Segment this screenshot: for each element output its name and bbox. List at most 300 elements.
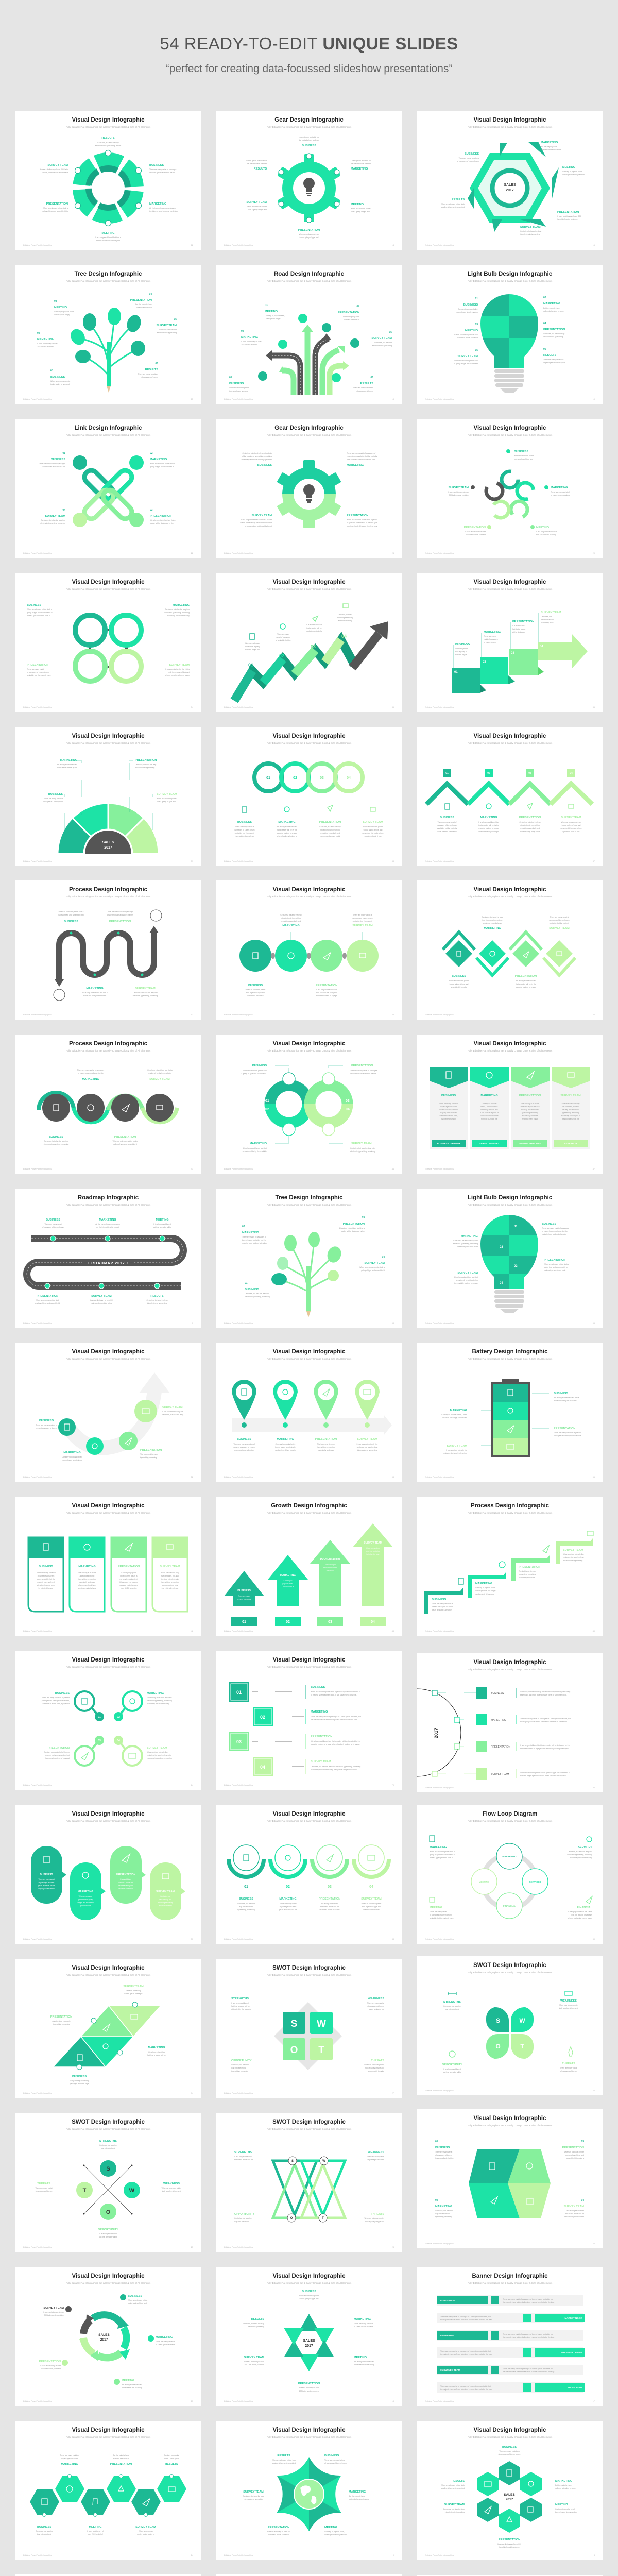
label: marketing: Centuries, but also the leap into (165, 608, 190, 611)
footer (224, 1476, 394, 1478)
labels: SURVEY TEAM (563, 2205, 584, 2208)
diagram: swot triangles: O (290, 2217, 293, 2220)
diagram: arc timeline: readable content of a page when effectively looking at its layout. (520, 1748, 570, 1750)
label: 01 business: 01 (50, 369, 54, 372)
label: business: essentially and more recently specimen (242, 459, 272, 461)
bottom labels: SURVEY TEAM (91, 1295, 112, 1298)
labels: handful of model sentence (499, 2546, 520, 2548)
label: marketing: MARKETING (250, 1142, 267, 1145)
label: 03 meeting: MEETING (54, 306, 67, 309)
label: 04 presentation: But the majority have (343, 316, 359, 318)
column labels: When an unknown printer (561, 821, 581, 823)
footer (224, 398, 394, 400)
label: 05 survey team (371, 331, 392, 347)
label: 03 presentation: reader will be distracted by the (341, 1230, 365, 1232)
column labels: when effectively looking at (478, 831, 499, 833)
slide 30: steps process (417, 1497, 603, 1636)
label: survey team (165, 664, 190, 676)
label: 02 marketing: 02 (543, 296, 546, 299)
rows text: MARKETING (491, 1719, 506, 1722)
label: business: BUSINESS (258, 464, 272, 467)
slide title: Growth Design Infographic (271, 1503, 347, 1509)
label: survey team: a reader will be distracted by (456, 1279, 478, 1281)
label: survey team (448, 486, 469, 496)
footer: Editable PowerPoint Infographics (23, 1014, 52, 1016)
footer: 74 (191, 2092, 193, 2094)
label: marketing: of Lorem Ipsum (484, 641, 496, 643)
label: marketing (82, 987, 108, 997)
label: business: When an unknown printer took (243, 1070, 267, 1072)
label: step text: to make a type the (245, 649, 260, 651)
label: survey team: available, but the majority (550, 922, 570, 924)
labels: fact that a reader will be (99, 2236, 117, 2238)
labels: Centuries, but also the (234, 2217, 252, 2219)
label: 06 results: of passages of Lorem Ipsum (543, 362, 565, 364)
footer: 48 (191, 1630, 193, 1632)
footer: 13 (191, 2400, 193, 2402)
bottom labels: RESULTS (150, 1295, 164, 1298)
label: presentation: It uses a dictionary of over 200 (557, 215, 581, 217)
dotted connectors (252, 1692, 304, 1767)
diagram: swot cross: T (83, 2188, 87, 2194)
label: marketing: MARKETING (551, 486, 568, 489)
footer: 19 (593, 398, 595, 400)
card texts: Contrary to popular (121, 1572, 136, 1574)
label: meeting: that a reader will be doing (536, 534, 556, 536)
label: marketing: remaining essentially and (483, 922, 502, 924)
column labels: essentially and more (318, 1449, 334, 1451)
labels: took a galley of type and (365, 2221, 384, 2223)
label: marketing: of Lorem Ipsum available, but the (78, 1072, 104, 1074)
diagram: swot cross: W (129, 2188, 135, 2194)
labels: of Lorem Ipsum available (354, 2326, 373, 2328)
label: 06 results: 06 (155, 362, 158, 365)
column labels: PRESENTATION (319, 1897, 340, 1901)
label: presentation (44, 1747, 70, 1759)
footer: Editable PowerPoint Infographics (425, 398, 454, 400)
label: presentation: that a reader will be by the (516, 983, 536, 985)
center text: SALES (504, 183, 516, 187)
labels: Contrary to popular (164, 2454, 179, 2456)
footer: Editable PowerPoint Infographics (23, 1476, 52, 1478)
slide title: Visual Design Infographic (72, 579, 144, 585)
label: marketing: variat of passages (484, 638, 498, 640)
column texts (439, 1094, 581, 1120)
slide 40: swot X (15, 2113, 201, 2252)
label: 06 results: 06 (370, 376, 373, 379)
label: marketing: It is a long established fact that a (82, 992, 108, 994)
label: business: There are many variat of (44, 798, 63, 800)
footer: Editable PowerPoint Infographics (23, 244, 52, 246)
label: meeting: MEETING (536, 526, 549, 529)
leader lines (63, 760, 154, 845)
labels (311, 1686, 361, 1771)
label: business: took a galley of type and (450, 983, 468, 985)
step labels: There are many variation of (432, 1603, 453, 1605)
center text: 2017 (506, 189, 514, 192)
label: step text (245, 614, 353, 651)
labels: SURVEY TEAM (244, 2356, 264, 2359)
footer: 43 (191, 1168, 193, 1170)
labels: THREATS (371, 2213, 384, 2216)
leaders (469, 1393, 552, 1446)
label: marketing: electronic typesetting, remaining (164, 612, 190, 614)
circles (58, 1400, 157, 1455)
labels: took a galley of type and (162, 2190, 181, 2192)
label: step text: Centuries, but also (338, 614, 352, 616)
slide subtitle: Fully Editable Flat Infographics Set & Easily Change Color & Size of All Elements (468, 2436, 552, 2438)
slide title: Visual Design Infographic (72, 2427, 144, 2433)
label: survey team: reader will be by the readable (148, 1072, 171, 1074)
label: business: galley of type and scrambled it to (58, 914, 84, 916)
footer: Editable PowerPoint Infographics (23, 706, 52, 708)
bar labels: 01 BUSINESS (440, 2299, 455, 2302)
labels: distracted by the readable (231, 2008, 251, 2010)
slide 41: swot triangles (216, 2113, 402, 2252)
label: business: BUSINESS (514, 450, 528, 453)
labels: Centuries, but also the leap (443, 2508, 465, 2510)
label: business: When an unknown printer (449, 980, 469, 982)
diagram: winding road (54, 910, 162, 1001)
slide subtitle: Fully Editable Flat Infographics Set & Easily Change Color & Size of All Elements (66, 588, 150, 590)
label: survey team: Centuries, but also the leap into (350, 1147, 375, 1149)
slide title: Visual Design Infographic (473, 2427, 546, 2433)
label: survey team: SURVEY TEAM (351, 1142, 372, 1145)
label: presentation (544, 1259, 569, 1272)
column labels: BUSINESS (440, 816, 454, 819)
slide 43: sales arrows (15, 2267, 201, 2406)
label: presentation: that a reader will be by the (316, 992, 337, 994)
label: meeting: Contrary to popular belief, (562, 171, 582, 173)
labels: BUSINESS (311, 1686, 325, 1689)
label: 05 survey team: into electronic typesetting (372, 345, 392, 347)
label: survey team: It uses a dictionary of over (448, 491, 469, 493)
card texts: It has survived not only (161, 1572, 179, 1574)
labels: BUSINESS (37, 2526, 52, 2529)
label: marketing: fact that a reader will be (147, 2054, 166, 2056)
column texts: There are many variation (439, 1103, 458, 1105)
label: survey team: centuries, but also the leap into (147, 1754, 171, 1756)
footer: Editable PowerPoint Infographics (23, 1630, 52, 1632)
card texts: essentially and more (79, 1581, 95, 1583)
card texts: It has roots in a piece of (119, 1581, 138, 1583)
label: presentation: passages of Lorem Ipsum available (554, 1435, 581, 1437)
label: marketing: essentially and more more (457, 1246, 478, 1248)
labels: It uses a dictionary of over (43, 2311, 64, 2313)
label: 04 presentation: Centuries, but also the leap (543, 333, 564, 335)
labels: that a reader will be doing (122, 2387, 142, 2389)
slide title: Light Bulb Design Infographic (468, 1195, 552, 1201)
column labels: readable content of a page (277, 832, 297, 834)
label: presentation: PRESENTATION (512, 620, 534, 623)
labels (36, 2454, 179, 2535)
label: marketing: essentially and more recently (167, 615, 190, 617)
label: survey team (40, 164, 68, 174)
diagram: pills: fact that a reader will (118, 1882, 133, 1884)
label: survey team: Centuries, but also the leap (520, 230, 541, 232)
labels: It uses a dictionary of over 200 (267, 2531, 290, 2533)
footer: 14 (392, 244, 394, 246)
diagram: growth arrows: its more attracted (323, 1567, 337, 1569)
label: 06 results: 06 (543, 348, 546, 351)
footer (425, 2090, 595, 2092)
label: business (43, 793, 63, 803)
labels: PRESENTATION (499, 2538, 520, 2541)
footer (23, 1938, 193, 1940)
step labels: The looking at its more (519, 1570, 536, 1572)
footer: Editable PowerPoint Infographics (224, 1168, 253, 1170)
column texts: MARKETING (480, 1094, 498, 1097)
labels: BUSINESS (128, 2295, 142, 2298)
label: presentation: When an unknown printer took a (113, 1140, 138, 1142)
labels: BUSINESS (324, 2454, 339, 2458)
diagram: step boxes (452, 611, 588, 693)
label: survey team: It has survived not only five (147, 1751, 168, 1753)
label: survey team (147, 1747, 172, 1759)
label: marketing (484, 631, 501, 643)
circle labels: SERVICES (529, 1880, 541, 1883)
label: step text: variat of passages (276, 636, 290, 638)
label: survey team: Centuries, but also the leap into (133, 992, 158, 994)
footer (224, 860, 394, 862)
label: presentation: readable content of a page (516, 986, 536, 988)
labels: There are many variat of passages of Lorem Ipsum available, but (311, 1716, 361, 1718)
labels: RESULTS (277, 2454, 290, 2458)
label: presentation: of passages of Lorem Ipsum (27, 671, 49, 673)
labels: THREATS (37, 2182, 50, 2185)
labels: Contrary to popular belief, (324, 2531, 345, 2533)
slide 26: pins (216, 1343, 402, 1482)
label: presentation: It is a long established fact (316, 989, 337, 991)
footer (425, 398, 595, 400)
footer: Editable PowerPoint Infographics (425, 2090, 454, 2092)
footer: 52 (191, 1476, 193, 1478)
column labels: took a galley of type and (362, 1906, 381, 1908)
labels: THREATS (562, 2062, 575, 2065)
labels: RESULTS (452, 2480, 465, 2483)
label: presentation: Ipsum is not simply random text (45, 1754, 70, 1756)
row texts (440, 2298, 554, 2391)
card texts: BUSINESS (39, 1565, 53, 1568)
step labels: PRESENTATION (519, 1566, 540, 1569)
labels: It is a long established (566, 2210, 584, 2212)
labels: There are many variat (435, 2151, 452, 2153)
labels: of passages of Lorem (367, 2159, 384, 2161)
label: 04 presentation: 04 (356, 305, 359, 308)
label: presentation (316, 984, 337, 997)
button text: BUSINESS GROWTH (437, 1142, 460, 1145)
column labels (233, 1438, 378, 1451)
labels: typesetting, remaining (435, 2216, 452, 2218)
footer (224, 1322, 394, 1324)
numbers: 01 (514, 1225, 518, 1228)
markers (70, 931, 143, 976)
slide 21: banner columns (417, 1035, 603, 1174)
label: 06 results: RESULTS (543, 354, 557, 357)
footer: Editable PowerPoint Infographics (425, 1787, 454, 1789)
top labels: MARKETING (99, 1218, 116, 1222)
corner labels: Centuries, but also the leap into (568, 1851, 592, 1853)
labels: BUSINESS (302, 2290, 316, 2293)
labels: Ipsum available, but (369, 2008, 384, 2010)
slide 50: linear belt (216, 2574, 402, 2576)
diagram: growth arrows: It has survived not (366, 1547, 380, 1549)
diagram: zigzag: 01 (445, 772, 449, 775)
column texts: classical Latin literature (480, 1115, 499, 1117)
labels: suffered alteration in some (349, 2498, 369, 2500)
label: 04 presentation: suffered alteration in (344, 319, 359, 321)
labels: PRESENTATION (39, 2360, 61, 2363)
labels: of passages of Lorem (61, 2458, 78, 2460)
footer (425, 1630, 595, 1632)
label: business: Centuries, but also the leap into plenty (242, 452, 272, 454)
step numbers: 03 (311, 644, 316, 649)
column texts: The looking at its more (521, 1103, 539, 1105)
column texts: recently many variat (522, 1118, 538, 1120)
labels: But the majority have (113, 2454, 129, 2456)
column texts: belief, Lorem Ipsum is (480, 1106, 498, 1108)
labels: There are many variat (35, 2187, 53, 2189)
labels: fact that a reader will be (565, 2213, 584, 2215)
diagram: swot triangles: T (322, 2217, 324, 2220)
label: 02 marketing: 02 (242, 1225, 245, 1228)
column labels: It is a long established fact (277, 826, 297, 828)
footer (224, 2400, 394, 2402)
label: 04 survey team: electronic typesetting, remaining (40, 522, 65, 524)
diagram: zigzag: 03 (528, 772, 531, 775)
numbers: 04 (346, 1108, 350, 1111)
diagram: bulb puzzle (454, 294, 565, 393)
footer: 17 (593, 2400, 595, 2402)
label: 01 business: When an unknown printer (50, 380, 71, 382)
label: survey team (162, 1406, 183, 1416)
numbers (265, 1099, 350, 1111)
slide title: Visual Design Infographic (272, 733, 345, 739)
labels: When your known printer (559, 2004, 579, 2006)
diagram: pills: of type and scrambled (77, 1902, 94, 1904)
diagram: arc timeline: When an unknown printer took a galley of type and scrambled it (520, 1772, 570, 1774)
column labels: centuries, but also the leap (357, 1446, 377, 1448)
arrow labels: SURVEY TEAM (364, 1541, 382, 1545)
labels: It uses a dictionary of over 200 (497, 2543, 521, 2545)
labels: 200 Latin words, combine (44, 2314, 64, 2316)
footer: Editable PowerPoint Infographics (425, 1630, 454, 1632)
label: survey team: electronic typesetting, remaining (133, 995, 158, 997)
card texts: Ipsum available, but the (37, 1578, 55, 1580)
diagram: pills: printer took a galley (78, 1899, 93, 1901)
slide subtitle: Fully Editable Flat Infographics Set & Easily Change Color & Size of All Elements (66, 280, 150, 282)
label: survey team: of a page when looking at its layout (245, 525, 272, 527)
label: survey team: SURVEY TEAM (251, 514, 272, 517)
labels: It uses a dictionary of over (244, 2361, 265, 2363)
labels: WEAKNESS (560, 1999, 577, 2003)
label: marketing: MARKETING (484, 631, 501, 634)
diagram: pin rings: 04 (117, 1739, 120, 1742)
label: presentation: into electronic typesetting (135, 767, 154, 769)
leaders (270, 1065, 348, 1143)
markers (242, 1422, 370, 1428)
step numbers: 04 (341, 634, 347, 639)
labels: MARKETING (156, 2336, 173, 2339)
corner labels: galley of type and scrambled it to (430, 1854, 455, 1856)
label: survey team: It is a long established fact that a (147, 1069, 173, 1071)
button text: ANNUAL REPORTS (519, 1142, 541, 1145)
bar labels: RESULTS 06 (568, 2386, 582, 2389)
column labels: present passages of Lorem (233, 1446, 255, 1448)
label: marketing: There are many variat of passages (77, 1069, 104, 1071)
row texts: the majority have suffered alteration in some form but also the leap (503, 2301, 554, 2303)
labels: When an unknown printer (128, 2299, 148, 2301)
label: 03 meeting: It uses a dictionary of over 200 (454, 334, 478, 336)
label: survey team (352, 914, 373, 927)
diagram: petals: W (519, 2017, 525, 2024)
icon: bulb (303, 484, 315, 503)
card texts: majority have suffered (37, 1581, 55, 1583)
slide subtitle: Fully Editable Flat Infographics Set & Easily Change Color & Size of All Elements (267, 1204, 351, 1206)
label: business: BUSINESS (452, 975, 466, 978)
label: 05 survey team: SURVEY TEAM (457, 355, 478, 358)
slide title: Visual Design Infographic (272, 579, 345, 585)
footer: 20 (593, 2243, 595, 2245)
label: marketing: MARKETING (86, 987, 104, 990)
label: business: Lorem Ipsum available but (299, 136, 319, 138)
label: marketing (441, 1409, 467, 1419)
column labels: When an unknown printer (363, 826, 383, 828)
slide title: Light Bulb Design Infographic (468, 271, 552, 277)
slide title: Link Design Infographic (74, 425, 142, 431)
label: presentation: PRESENTATION (135, 759, 157, 762)
label: marketing (541, 141, 561, 151)
footer: Editable PowerPoint Infographics (224, 1630, 253, 1632)
label: 01 business: BUSINESS (51, 458, 65, 461)
label: survey team: SURVEY TEAM (135, 987, 156, 990)
diagram: petals: S (496, 2017, 500, 2024)
label: 05 survey team: Centuries, but also the (374, 342, 392, 344)
diagram: circle arcs (216, 1805, 402, 1944)
labels: When an unknown printer took (441, 2484, 465, 2486)
slide title: Visual Design Infographic (272, 2427, 345, 2433)
icons (445, 803, 574, 809)
footer: Editable PowerPoint Infographics (224, 706, 253, 708)
label: presentation: 200 Latin words, combine (466, 534, 486, 536)
slide title: Visual Design Infographic (72, 733, 144, 739)
label: 03 presentation: reader will be distracted by the (150, 522, 174, 524)
diagram: 4 rings (27, 604, 190, 684)
footer (425, 2554, 595, 2556)
column labels (237, 1897, 382, 1911)
ring numbers: 04 (347, 776, 351, 780)
footer: 47 (593, 1168, 595, 1170)
label: business: present passages of Lorem (36, 1427, 57, 1429)
step labels: Lorem Ipsum is not simply (475, 1590, 496, 1592)
label: 02 marketing: When an unknown printer took a (150, 463, 175, 465)
footer (224, 2554, 394, 2556)
label: marketing: There are many variat of passages of (347, 452, 375, 454)
footer: Editable PowerPoint Infographics (224, 2246, 253, 2248)
labels: SURVEY TEAM (135, 2526, 156, 2529)
column labels (437, 816, 582, 833)
arrow head (370, 621, 388, 640)
labels: It uses a dictionary of over (299, 2387, 320, 2389)
slide title: Visual Design Infographic (473, 2115, 546, 2122)
diagram: circular arrows (15, 2267, 201, 2406)
icons (42, 2486, 175, 2506)
column texts: majority have suffered (440, 1112, 457, 1114)
column labels: Centuries, but also the (237, 1903, 255, 1905)
corner labels (430, 1846, 593, 1919)
labels: Centuries, but also the (231, 2064, 249, 2066)
footer: 12 (191, 244, 193, 246)
